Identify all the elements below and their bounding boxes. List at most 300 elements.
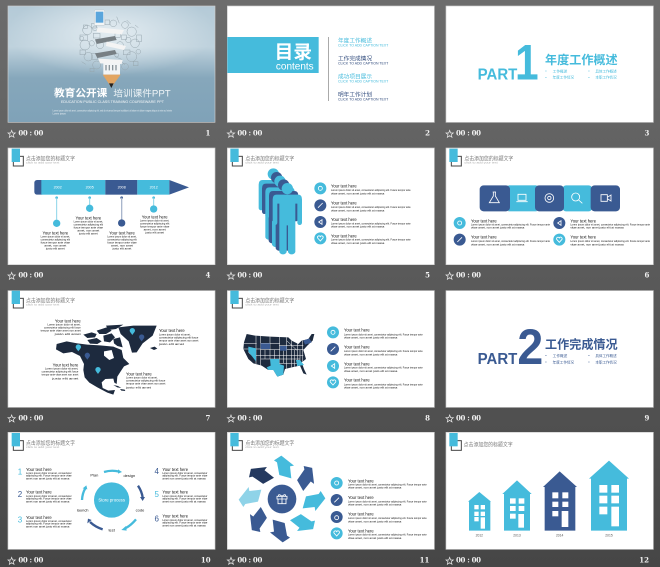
header text: click to add your text bbox=[26, 161, 60, 165]
house 2014: 2014 bbox=[556, 533, 564, 537]
header tab bbox=[12, 149, 23, 166]
text block 2: tempor ante vitae amet non amet bbox=[42, 373, 78, 377]
list item 4: vitae amet, non amet justo elit at massa bbox=[331, 241, 385, 245]
bullet list: 本职工作情况 bbox=[595, 359, 617, 364]
footer: time: 00 : 00 bbox=[18, 271, 43, 280]
item 2: Your text here bbox=[471, 234, 497, 239]
year labels: 2012 bbox=[150, 186, 158, 190]
list item 1: Your text here bbox=[331, 183, 357, 188]
text block 1: Your text here bbox=[55, 319, 81, 324]
text block 2 bbox=[74, 215, 103, 235]
right item 4: Your text here bbox=[162, 467, 189, 472]
contents english: contents bbox=[276, 62, 314, 73]
item 1: CLICK TO ADD CAPTION TEXT bbox=[338, 44, 389, 48]
bullet list: • bbox=[588, 360, 590, 364]
list item 4: Lorem ipsum dolor sit amet, consectetur adipiscing elit. Fusce tempor ante bbox=[348, 533, 427, 537]
footer: time: 00 : 00 bbox=[237, 129, 262, 138]
header text bbox=[26, 297, 75, 307]
left item 1: adipiscing elit. Fusce tempor ante vitae bbox=[26, 474, 72, 478]
house 2013: 2013 bbox=[513, 533, 521, 537]
pencil bbox=[103, 63, 121, 88]
cycle labels: Plan bbox=[90, 473, 98, 478]
header text: click to add your text bbox=[245, 445, 279, 449]
item 3: CLICK TO ADD CAPTION TEXT bbox=[338, 80, 389, 84]
year labels: 2008 bbox=[118, 186, 126, 190]
cover title: 教育公开课 bbox=[54, 87, 108, 100]
left item 2: amet non amet justo elit at massa bbox=[26, 499, 70, 503]
text block 1 bbox=[41, 319, 81, 336]
cover description: Lorem ipsum dolor sit amet, consectetur adipiscing elit, sed do eiusmod tempor incididunt ut labore et dolore magna aliqua ut enim ad minim bbox=[53, 110, 172, 113]
list item 2: vitae amet, non amet justo elit at massa bbox=[331, 208, 385, 212]
list item 1: Lorem ipsum dolor sit amet, consectetur adipiscing elit. Fusce tempor ante bbox=[348, 482, 427, 486]
footer: slide number: 8 bbox=[425, 413, 430, 422]
text block 3: Lorem ipsum dolor sit amet, bbox=[107, 235, 137, 239]
right item 4: amet non amet justo elit at massa bbox=[162, 476, 206, 480]
house 2015: 2015 bbox=[605, 533, 613, 537]
list item 4 bbox=[331, 527, 427, 540]
center circle with gift icon bbox=[268, 485, 296, 513]
footer: slide number: 6 bbox=[644, 271, 649, 280]
house 2012 bbox=[468, 492, 491, 537]
footer: time: 00 : 00 bbox=[237, 413, 262, 422]
cover glow bbox=[8, 6, 215, 93]
footer: time: 00 : 00 bbox=[18, 413, 43, 422]
icon: laptop bbox=[516, 194, 528, 202]
text block 4: justo elit amet bbox=[125, 385, 151, 389]
panel bbox=[446, 291, 653, 407]
list item 2 bbox=[314, 199, 411, 212]
text block 2: Lorem ipsum dolor sit amet, bbox=[74, 219, 103, 223]
text block 1: Lorem ipsum dolor sit amet, bbox=[47, 323, 81, 327]
cover description: Lorem ipsum bbox=[53, 112, 66, 115]
icon: flask bbox=[489, 192, 499, 203]
text block 3: Your text here bbox=[159, 328, 185, 333]
right item 5: amet non amet justo elit at massa bbox=[162, 499, 206, 503]
bullet list: 具体工作概述 bbox=[595, 353, 617, 358]
cycle labels: code bbox=[136, 507, 145, 512]
list item 2 bbox=[327, 343, 423, 356]
item 1: vitae amet, non amet justo elit at massa bbox=[471, 226, 525, 230]
header text bbox=[245, 155, 295, 165]
part label: PART bbox=[478, 66, 518, 83]
item 2 bbox=[454, 234, 550, 246]
right item 6: amet non amet justo elit at massa bbox=[162, 523, 206, 527]
footer: time: 00 : 00 bbox=[456, 413, 481, 422]
list item 1: vitae amet, non amet justo elit at massa bbox=[331, 191, 385, 195]
footer: slide number: 2 bbox=[425, 129, 430, 138]
slide 2: contents bbox=[227, 6, 434, 138]
list item 1 bbox=[331, 477, 427, 490]
right item 4: Lorem ipsum dolor sit amet, consectetur bbox=[162, 471, 207, 475]
header text: click to add your text bbox=[26, 303, 60, 307]
bullet list: 具体工作概述 bbox=[595, 68, 617, 73]
text block 1: justo elit amet bbox=[45, 247, 65, 251]
text block 1: consectetur adipiscing elit fusce bbox=[44, 326, 81, 330]
left item 3: Your text here bbox=[26, 515, 52, 520]
bullet list: • bbox=[545, 360, 547, 364]
list item 3: vitae amet, non amet justo elit at massa bbox=[331, 225, 385, 229]
list item 3: Your text here bbox=[344, 361, 370, 366]
list item 4: Your text here bbox=[348, 528, 374, 533]
marker 1 bbox=[53, 196, 60, 227]
bullet list: 工作概述 bbox=[553, 353, 568, 358]
people figures bbox=[259, 168, 302, 254]
bullet list: • bbox=[545, 75, 547, 79]
right item 5 bbox=[154, 490, 208, 503]
text block 2 bbox=[42, 362, 79, 380]
house 2014 bbox=[543, 471, 577, 537]
text block 3: Your text here bbox=[109, 231, 136, 236]
text block 1: Your text here bbox=[42, 231, 69, 236]
cycle labels: design bbox=[123, 473, 135, 478]
house 2013 bbox=[502, 480, 532, 537]
footer: time: 00 : 00 bbox=[456, 271, 481, 280]
right item 6: Lorem ipsum dolor sit amet, consectetur bbox=[162, 518, 207, 522]
year labels: 2002 bbox=[54, 186, 62, 190]
left item 1: Your text here bbox=[26, 467, 52, 472]
header text: click to add your text bbox=[245, 161, 279, 165]
north america map bbox=[56, 325, 157, 395]
bullet list: 年度工作情况 bbox=[553, 359, 575, 364]
left item 3 bbox=[18, 515, 72, 528]
text block 3: fusce tempor ante vitae bbox=[107, 241, 137, 245]
cover description bbox=[53, 110, 172, 115]
footer: time: 00 : 00 bbox=[237, 271, 262, 280]
right item 4: adipiscing elit. Fusce tempor ante vitae bbox=[162, 474, 208, 478]
item 2 bbox=[338, 54, 389, 66]
panel bbox=[8, 432, 215, 549]
bullet list: 本职工作情况 bbox=[595, 75, 617, 80]
slide 8: usa map bbox=[227, 291, 434, 422]
list item 2: Your text here bbox=[331, 200, 357, 205]
text block 4: Lorem ipsum dolor sit amet, bbox=[140, 219, 169, 223]
item 1 bbox=[454, 217, 550, 230]
text block 2: justo elit amet bbox=[51, 376, 79, 380]
header text bbox=[464, 155, 514, 165]
header tab bbox=[230, 149, 242, 166]
footer: slide number: 10 bbox=[201, 555, 211, 564]
header text bbox=[26, 155, 75, 165]
list item 3: Your text here bbox=[348, 512, 374, 517]
item 4 bbox=[553, 234, 650, 246]
header text: 点击添加您的标题文字 bbox=[26, 155, 75, 163]
part number: 2 bbox=[517, 319, 543, 375]
text block 4 bbox=[125, 371, 166, 389]
left item 1: Lorem ipsum dolor sit amet, consectetur bbox=[26, 471, 72, 475]
left item 3: adipiscing elit. Fusce tempor ante vitae bbox=[26, 522, 72, 526]
text block 4: justo elit amet bbox=[144, 231, 164, 235]
text block 1: fusce tempor ante vitae bbox=[41, 241, 70, 245]
bullet list: 工作概述 bbox=[553, 68, 568, 73]
bullet list: • bbox=[588, 75, 590, 79]
text block 3: justo elit amet bbox=[112, 247, 131, 251]
slide 6: icon blocks bbox=[446, 148, 653, 280]
list item 3: Lorem ipsum dolor sit amet, consectetur adipiscing elit. Fusce tempor ante bbox=[344, 366, 423, 370]
footer: time: 00 : 00 bbox=[18, 555, 43, 564]
text block 4: consectetur adipiscing elit bbox=[140, 222, 169, 226]
text block 2: amet, non amet bbox=[77, 228, 99, 232]
item 2: CLICK TO ADD CAPTION TEXT bbox=[338, 62, 389, 66]
house 2012: 2012 bbox=[476, 533, 483, 537]
left item 2: adipiscing elit. Fusce tempor ante vitae bbox=[26, 497, 72, 501]
text block 4: Your text here bbox=[142, 215, 168, 220]
center label: Store process bbox=[98, 498, 125, 503]
header text: 点击添加您的标题文字 bbox=[464, 440, 513, 448]
map pins bbox=[76, 328, 144, 374]
text block 3: amet, non amet bbox=[111, 244, 133, 248]
marker 3 bbox=[118, 196, 125, 227]
list item 4: vitae amet, non amet justo elit at massa bbox=[348, 536, 402, 540]
list item 1: Your text here bbox=[344, 328, 370, 333]
list item 3: vitae amet, non amet justo elit at massa bbox=[344, 369, 398, 373]
text block 1: consectetur adipiscing elit bbox=[41, 238, 70, 242]
text block 4: Lorem ipsum dolor sit amet, bbox=[126, 376, 158, 380]
text block 2: Lorem ipsum dolor sit amet, bbox=[45, 367, 78, 371]
list item 1: vitae amet, non amet justo elit at massa bbox=[348, 486, 402, 490]
header text: 点击添加您的标题文字 bbox=[26, 439, 75, 447]
text block 4: consectetur adipiscing elit fusce bbox=[126, 379, 166, 383]
text block 4: fusce tempor ante vitae bbox=[140, 225, 170, 229]
header tab bbox=[12, 291, 23, 308]
divider bbox=[327, 37, 330, 101]
right item 4 bbox=[154, 467, 208, 480]
contents heading: 目录 bbox=[275, 42, 312, 63]
right item 6: Your text here bbox=[162, 514, 189, 519]
header text bbox=[245, 439, 295, 449]
text block 3 bbox=[107, 231, 137, 251]
text block 2: fusce tempor ante vitae bbox=[74, 225, 103, 229]
left item 2: Lorem ipsum dolor sit amet, consectetur bbox=[26, 494, 72, 498]
cycle arrows bbox=[82, 469, 145, 531]
part title: 工作完成情况 bbox=[545, 337, 618, 352]
footer: time: 00 : 00 bbox=[456, 555, 481, 564]
slide 12: houses chart bbox=[446, 432, 653, 564]
bullet list: • bbox=[545, 69, 547, 73]
list item 2: Your text here bbox=[344, 344, 370, 349]
left item 1 bbox=[18, 467, 72, 480]
item 1 bbox=[338, 36, 389, 48]
bullet list: 年度工作情况 bbox=[553, 75, 575, 80]
header text: 点击添加您的标题文字 bbox=[464, 155, 514, 163]
list item 4 bbox=[327, 376, 423, 390]
panel bbox=[446, 6, 653, 122]
item 1: 年度工作概述 bbox=[338, 36, 372, 44]
footer: slide number: 12 bbox=[639, 555, 649, 564]
panel bbox=[8, 148, 215, 265]
bullet list: • bbox=[588, 69, 590, 73]
list item 4 bbox=[314, 232, 411, 245]
text block 1: tempor ante vitae amet non amet bbox=[41, 329, 81, 333]
slide 9: part 2 bbox=[446, 291, 653, 422]
list item 4: vitae amet, non amet justo elit at massa bbox=[344, 386, 398, 390]
list item 2: vitae amet, non amet justo elit at massa bbox=[344, 352, 398, 356]
header text: click to add your text bbox=[245, 303, 279, 307]
panel bbox=[227, 148, 434, 265]
header tab bbox=[449, 149, 461, 166]
list item 4: Your text here bbox=[344, 378, 370, 383]
list item 1: Your text here bbox=[348, 478, 374, 483]
list item 3 bbox=[314, 216, 411, 229]
text block 1 bbox=[41, 231, 70, 251]
list item 3: vitae amet, non amet justo elit at massa bbox=[348, 519, 402, 523]
list item 2: vitae amet, non amet justo elit at massa bbox=[348, 503, 402, 507]
item 3: vitae amet, non amet justo elit at massa bbox=[570, 226, 624, 230]
cover panel bbox=[8, 6, 215, 122]
text block 2: consectetur adipiscing elit bbox=[74, 222, 103, 226]
right item 6 bbox=[154, 514, 208, 527]
left item 2: Your text here bbox=[26, 490, 52, 495]
left item 3: 3 bbox=[18, 515, 23, 524]
slide 7: north america map bbox=[8, 291, 215, 422]
header text bbox=[26, 439, 75, 449]
house 2015 bbox=[589, 461, 629, 537]
text block 3: consectetur adipiscing elit fusce bbox=[159, 335, 199, 339]
part number: 1 bbox=[515, 34, 539, 90]
header tab bbox=[230, 433, 242, 450]
text block 4: Your text here bbox=[126, 371, 152, 376]
right item 6: 6 bbox=[154, 514, 159, 523]
left item 2: 2 bbox=[18, 490, 23, 499]
footer: slide number: 5 bbox=[425, 271, 430, 280]
list item 3: Your text here bbox=[331, 217, 357, 222]
header text: 点击添加您的标题文字 bbox=[245, 439, 295, 447]
slide 10: process cycle bbox=[8, 432, 215, 564]
panel bbox=[446, 148, 653, 265]
slide 5: people bbox=[227, 148, 434, 280]
list item 2: Lorem ipsum dolor sit amet, consectetur adipiscing elit. Fusce tempor ante bbox=[344, 349, 423, 353]
text block 3: tempor ante vitae amet non amet bbox=[159, 338, 198, 342]
phone bbox=[94, 10, 105, 25]
slide 11: arrow wheel bbox=[227, 432, 434, 564]
footer: slide number: 7 bbox=[205, 413, 210, 422]
item 4: 明年工作计划 bbox=[338, 90, 372, 98]
header text: 点击添加您的标题文字 bbox=[245, 297, 295, 305]
header text: click to add your text bbox=[464, 161, 498, 165]
panel bbox=[227, 6, 434, 122]
list item 4: Your text here bbox=[331, 233, 357, 238]
left item 3: Lorem ipsum dolor sit amet, consectetur bbox=[26, 519, 72, 523]
item 4: CLICK TO ADD CAPTION TEXT bbox=[338, 98, 389, 102]
slide 3: part 1 bbox=[446, 6, 653, 138]
left item 1: 1 bbox=[18, 467, 23, 476]
header text: 点击添加您的标题文字 bbox=[26, 297, 75, 305]
left item 3: amet non amet justo elit at massa bbox=[26, 524, 70, 528]
part label: PART bbox=[478, 351, 518, 368]
list item 1 bbox=[327, 326, 423, 340]
item 3 bbox=[338, 72, 389, 84]
list item 2 bbox=[331, 494, 427, 507]
item 4: vitae amet, non amet justo elit at massa bbox=[570, 242, 624, 246]
footer: time: 00 : 00 bbox=[18, 129, 43, 138]
list item 3: Lorem ipsum dolor sit amet, consectetur adipiscing elit. Fusce tempor ante bbox=[348, 516, 427, 520]
footer: time: 00 : 00 bbox=[237, 555, 262, 564]
text block 1: Lorem ipsum dolor sit amet, bbox=[41, 235, 70, 239]
footer: slide number: 4 bbox=[205, 271, 210, 280]
left item 2 bbox=[18, 490, 72, 503]
item 3: 成功项目展示 bbox=[338, 72, 372, 80]
footer: slide number: 9 bbox=[644, 413, 649, 422]
text block 4: tempor ante vitae amet non amet bbox=[126, 382, 165, 386]
list item 1: Lorem ipsum dolor sit amet, consectetur adipiscing elit. Fusce tempor ante bbox=[331, 188, 411, 192]
year labels bbox=[54, 186, 158, 190]
marker 4 bbox=[150, 196, 157, 213]
footer: slide number: 3 bbox=[644, 129, 649, 138]
header tab bbox=[230, 291, 242, 308]
text block 3: Lorem ipsum dolor sit amet, bbox=[159, 332, 191, 336]
right item 5: adipiscing elit. Fusce tempor ante vitae bbox=[162, 497, 208, 501]
panel bbox=[227, 432, 434, 549]
slide 4: timeline pencil bbox=[8, 148, 215, 280]
list item 4: Lorem ipsum dolor sit amet, consectetur adipiscing elit. Fusce tempor ante bbox=[331, 238, 411, 242]
text block 2: Your text here bbox=[53, 362, 79, 367]
text block 3: justo elit amet bbox=[158, 342, 184, 346]
bullet list: • bbox=[545, 354, 547, 358]
header tab bbox=[12, 433, 23, 450]
cycle labels bbox=[77, 473, 145, 533]
item 2: Lorem ipsum dolor sit amet, consectetur adipiscing elit. Fusce tempor ante bbox=[471, 239, 550, 243]
list item 4: Lorem ipsum dolor sit amet, consectetur adipiscing elit. Fusce tempor ante bbox=[344, 382, 423, 386]
list item 3: Lorem ipsum dolor sit amet, consectetur adipiscing elit. Fusce tempor ante bbox=[331, 221, 411, 225]
header text: click to add your text bbox=[26, 445, 60, 449]
footer: slide number: 1 bbox=[205, 129, 210, 138]
item 1: Your text here bbox=[471, 218, 497, 223]
item 1: Lorem ipsum dolor sit amet, consectetur adipiscing elit. Fusce tempor ante bbox=[471, 222, 550, 226]
right item 5: Lorem ipsum dolor sit amet, consectetur bbox=[162, 494, 207, 498]
text block 2: justo elit amet bbox=[78, 231, 98, 235]
text block 2: Your text here bbox=[75, 215, 102, 220]
cover english line: EDUCATION PUBLIC CLASS TRAINING COURSEWARE PPT bbox=[61, 100, 164, 104]
ribbons bbox=[95, 27, 126, 64]
panel bbox=[8, 291, 215, 407]
list item 2: Lorem ipsum dolor sit amet, consectetur adipiscing elit. Fusce tempor ante bbox=[331, 205, 411, 209]
item 2: vitae amet, non amet justo elit at massa bbox=[471, 242, 525, 246]
list item 2: Your text here bbox=[348, 495, 374, 500]
right item 4: 4 bbox=[154, 467, 159, 476]
cycle labels: launch bbox=[77, 507, 89, 512]
list item 3 bbox=[331, 511, 427, 523]
bullet list bbox=[545, 68, 617, 80]
item 3 bbox=[553, 217, 650, 230]
text block 3 bbox=[158, 328, 199, 346]
right item 6: adipiscing elit. Fusce tempor ante vitae bbox=[162, 521, 208, 525]
list item 1: Lorem ipsum dolor sit amet, consectetur adipiscing elit. Fusce tempor ante bbox=[344, 332, 423, 336]
footer: slide number: 11 bbox=[420, 555, 429, 564]
center circle bbox=[94, 482, 129, 518]
right item 5: Your text here bbox=[162, 490, 189, 495]
cover subtitle: 培训课件PPT bbox=[113, 88, 171, 99]
list item 3 bbox=[327, 360, 423, 373]
icon: magnifier bbox=[572, 193, 582, 203]
list item 2: Lorem ipsum dolor sit amet, consectetur adipiscing elit. Fusce tempor ante bbox=[348, 499, 427, 503]
header text: 点击添加您的标题文字 bbox=[245, 155, 295, 163]
bullet list: • bbox=[588, 354, 590, 358]
part title: 年度工作概述 bbox=[545, 52, 618, 67]
item 4: Your text here bbox=[570, 234, 597, 239]
right item 5: 5 bbox=[154, 490, 159, 499]
slide 1: cover bbox=[8, 6, 215, 138]
bullet list bbox=[545, 353, 617, 364]
text block 1: justo elit amet bbox=[53, 332, 81, 336]
pencil bar bbox=[34, 180, 189, 195]
item 3: Your text here bbox=[570, 218, 597, 223]
list item 1: vitae amet, non amet justo elit at massa bbox=[344, 336, 398, 340]
left item 1: amet non amet justo elit at massa bbox=[26, 476, 70, 480]
text block 3: consectetur adipiscing elit bbox=[107, 238, 137, 242]
arrow wheel bbox=[239, 456, 325, 542]
text block 4: amet, non amet bbox=[144, 228, 166, 232]
panel bbox=[446, 432, 653, 549]
footer: time: 00 : 00 bbox=[456, 129, 481, 138]
